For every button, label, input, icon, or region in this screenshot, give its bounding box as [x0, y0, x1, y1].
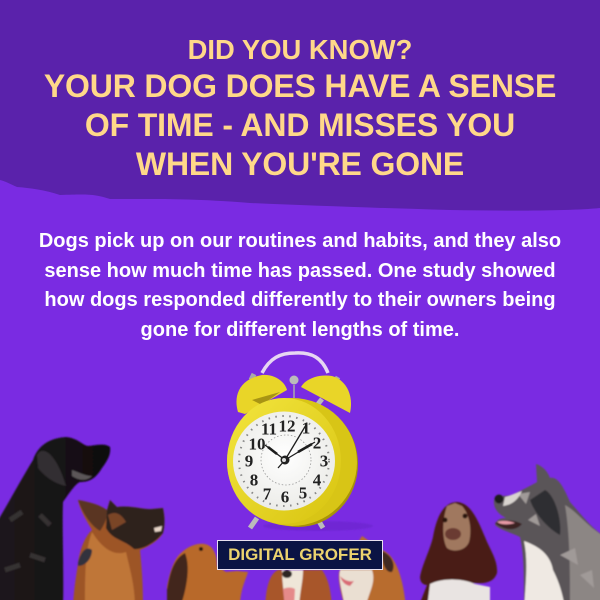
dog: spaniel [418, 502, 497, 600]
title: WHEN YOU'RE GONE [136, 146, 464, 182]
clock numerals: 6 [281, 488, 289, 506]
dog: akita [494, 464, 600, 600]
alarm clock [227, 353, 373, 531]
body text: Dogs pick up on our routines and habits, and they also [39, 230, 561, 252]
clock numerals: 7 [263, 484, 272, 504]
clock numerals: 2 [313, 434, 321, 452]
clock numerals: 12 [278, 416, 296, 436]
logo badge [217, 540, 383, 570]
clock numerals: 3 [320, 452, 328, 470]
clock numerals: 4 [313, 470, 322, 490]
clock numerals: 8 [250, 470, 258, 490]
clock numerals: 5 [299, 484, 307, 502]
clock numerals: 9 [245, 452, 253, 470]
title: OF TIME - AND MISSES YOU [85, 107, 515, 143]
body text [39, 230, 561, 341]
body text: how dogs responded differently to their owners being [44, 289, 556, 311]
title [44, 34, 556, 182]
dog: beagle behind logo [265, 570, 332, 600]
clock numerals: 10 [248, 434, 266, 454]
dog: german shepherd [73, 500, 164, 600]
title: YOUR DOG DOES HAVE A SENSE [44, 68, 556, 104]
logo badge: DIGITAL GROFER [228, 545, 372, 564]
dog: bulldog [339, 536, 406, 600]
clock numerals: 1 [302, 418, 310, 438]
title: DID YOU KNOW? [188, 34, 412, 65]
dog: black great dane [0, 437, 110, 600]
body text: sense how much time has passed. One study showed [44, 260, 556, 282]
body text: gone for different lengths of time. [141, 319, 459, 341]
dog: dachshund [167, 544, 248, 600]
clock numerals: 11 [261, 420, 277, 438]
clock numerals [245, 416, 328, 506]
